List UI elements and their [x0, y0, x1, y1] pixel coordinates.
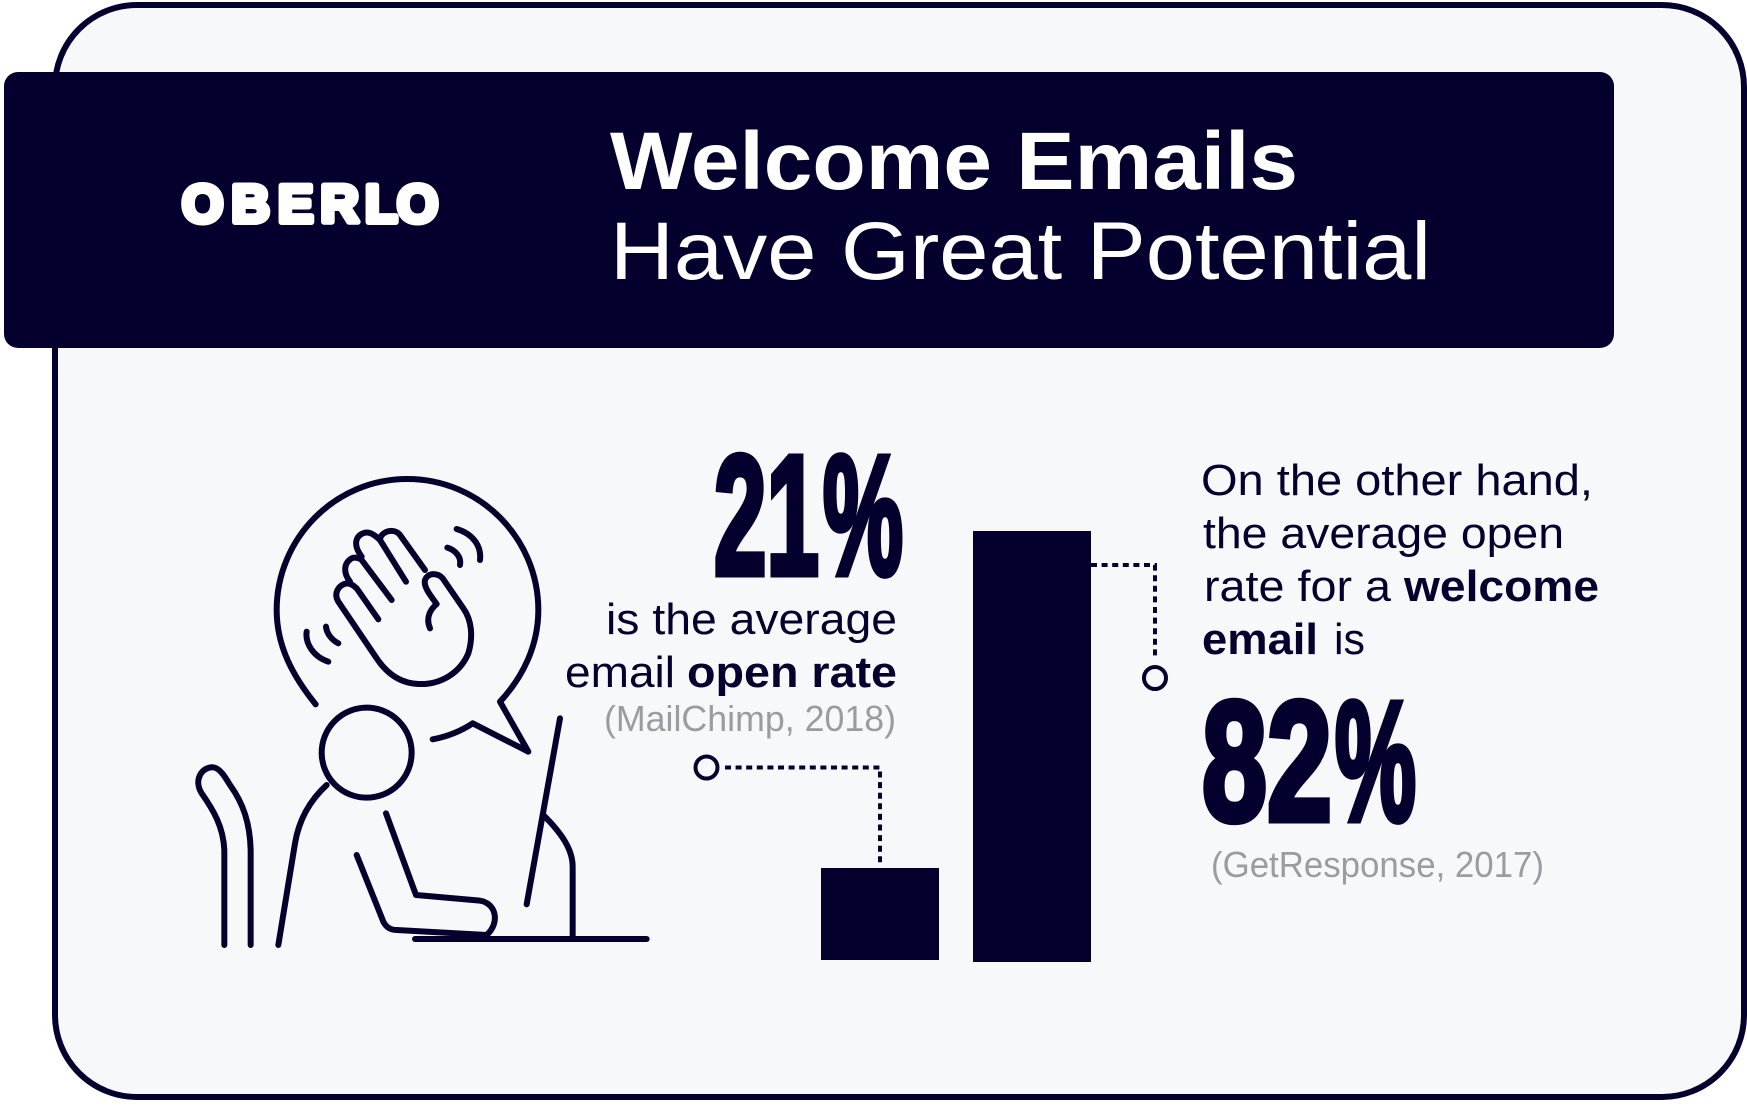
title: Welcome Emails	[610, 116, 1298, 207]
desk	[415, 930, 647, 948]
logo: Oberlo: OBERLO	[182, 175, 438, 234]
connector: left bar to text	[696, 756, 880, 864]
text: email open rate description	[565, 595, 897, 697]
text: welcome email description: email	[1202, 615, 1318, 664]
stat: 82%: 82	[1202, 667, 1332, 857]
bar: 82%	[973, 531, 1091, 962]
person arm	[357, 813, 495, 935]
text: email open rate description: is the average	[606, 595, 897, 644]
text: welcome email description: On the other hand,	[1201, 456, 1593, 505]
text: welcome email description: rate for a	[1204, 562, 1392, 611]
speech bubble	[277, 479, 538, 752]
icon: waving hand	[306, 529, 480, 684]
person head	[322, 708, 412, 798]
source: GetResponse: (GetResponse, 2017)	[1211, 844, 1544, 885]
illustration: person at laptop with waving-hand speech bubble	[198, 479, 647, 945]
text: welcome email description	[1201, 456, 1599, 664]
header banner	[4, 72, 1614, 348]
text: email open rate description: email	[565, 648, 675, 697]
laptop stand	[543, 815, 573, 939]
bar: 21%	[821, 868, 939, 960]
stat: 21%: %	[823, 421, 903, 611]
source: MailChimp: (MailChimp, 2018)	[604, 698, 896, 739]
text: email open rate description: open rate	[687, 648, 897, 697]
person back	[278, 785, 327, 945]
laptop screen	[527, 718, 560, 904]
chair	[198, 767, 251, 945]
stat: 82%: %	[1335, 667, 1416, 857]
connector: right bar to text	[1091, 565, 1166, 689]
title: Have Great Potential	[610, 206, 1431, 297]
text: welcome email description: the average open	[1203, 509, 1564, 558]
text: welcome email description: is	[1334, 615, 1365, 664]
stat: 21%: 21	[714, 421, 819, 611]
title	[610, 116, 1431, 297]
text: welcome email description: welcome	[1403, 562, 1599, 611]
